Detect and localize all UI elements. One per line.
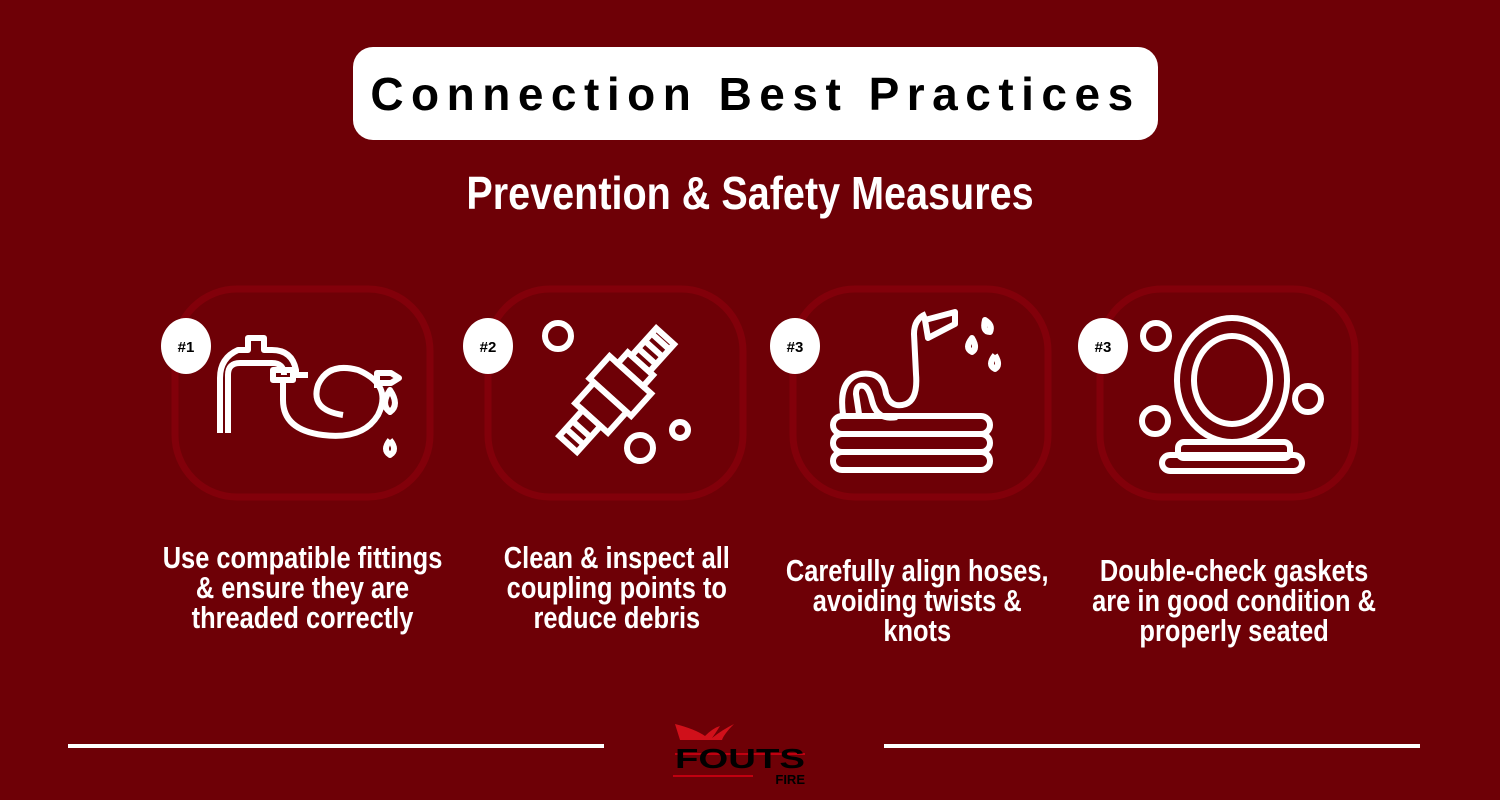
icon: gasket — [1142, 318, 1321, 471]
badge #3 (4th): #3 — [1095, 339, 1111, 356]
text 2 — [504, 540, 730, 635]
badge #2 — [463, 318, 513, 374]
logo: FIRE — [775, 772, 805, 787]
panel 3 — [793, 289, 1048, 497]
panel 4 — [1100, 289, 1355, 497]
text 3: Carefully align hoses, — [786, 553, 1048, 588]
text 4 — [1092, 553, 1376, 648]
logo: FOUTS — [675, 743, 805, 774]
text 1: & ensure they are — [196, 570, 409, 605]
title — [353, 47, 1158, 140]
text 1: Use compatible fittings — [163, 540, 442, 575]
text 4: Double-check gaskets — [1100, 553, 1368, 588]
text 3 — [786, 553, 1048, 648]
text 2: reduce debris — [534, 600, 700, 635]
badge #1: #1 — [178, 339, 194, 356]
badge #3 — [770, 318, 820, 374]
text 4: are in good condition & — [1092, 583, 1376, 618]
text 4: properly seated — [1139, 613, 1329, 648]
bottom line left — [68, 744, 604, 748]
badge #3 (4th) — [1078, 318, 1128, 374]
subtitle: Prevention & Safety Measures — [466, 167, 1034, 219]
title: Connection Best Practices — [370, 68, 1141, 120]
text 3: avoiding twists & — [812, 583, 1022, 618]
text 2: coupling points to — [507, 570, 727, 605]
badge #3: #3 — [787, 339, 803, 356]
text 1 — [163, 540, 442, 635]
text 2: Clean & inspect all — [504, 540, 730, 575]
panel 1 — [175, 289, 430, 497]
panel 2 — [488, 289, 743, 497]
icon: pipe hose — [220, 338, 399, 455]
badge #1 — [161, 318, 211, 374]
text 1: threaded correctly — [192, 600, 413, 635]
icon: coiled hose — [833, 312, 998, 470]
text 3: knots — [883, 613, 951, 648]
icon: coupling — [545, 318, 688, 463]
bottom line right — [884, 744, 1420, 748]
badge #2: #2 — [480, 339, 496, 356]
logo — [673, 724, 805, 787]
